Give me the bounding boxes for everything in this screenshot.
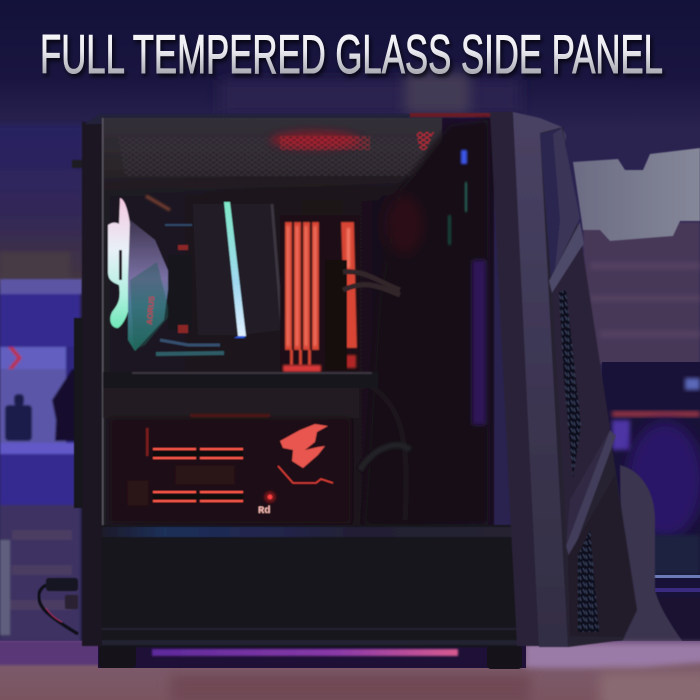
front bezel dark strip [490, 112, 540, 646]
front mesh vent lower [578, 530, 599, 632]
VRM heatsink cover [128, 220, 170, 351]
PCIe slot lights [153, 448, 243, 502]
PC case [72, 112, 637, 647]
middle panel [552, 246, 616, 560]
case feet [99, 645, 522, 669]
AORUS label: AORUS [145, 295, 157, 325]
power cable [39, 578, 78, 634]
under-case shadow and glow [98, 645, 526, 668]
blue reflective strip [102, 527, 518, 537]
upper recess [540, 128, 580, 278]
right side cable and liquid area [360, 120, 488, 525]
graphics card [103, 372, 378, 418]
front bezel light band [513, 112, 572, 647]
dark silhouette on shelf [52, 369, 78, 441]
top mesh vent [118, 131, 434, 176]
debug LED [268, 494, 272, 500]
top edge [84, 114, 495, 124]
front mesh vent upper [559, 290, 581, 478]
RAM modules [280, 215, 400, 375]
motherboard accents [146, 196, 224, 354]
table top [0, 641, 700, 700]
left wall shelf with decorations [0, 279, 82, 642]
diagonal trim upper [549, 222, 584, 293]
icon: AORUS eagle logo [278, 424, 333, 483]
debug code readout: Rd [258, 505, 271, 517]
front panel main [540, 127, 637, 647]
lower motherboard [110, 414, 350, 523]
case rear frame [82, 122, 104, 646]
gaming chair [620, 465, 685, 645]
cooler light bar [224, 202, 246, 336]
right wall window [573, 148, 700, 364]
icon: chevron sign [8, 347, 22, 369]
background monitor [602, 362, 700, 647]
glass side panel [102, 118, 494, 528]
lower shroud [102, 525, 518, 647]
lower recess [568, 475, 637, 637]
rear fan RGB ring [108, 198, 133, 328]
CPU cooler [193, 202, 282, 338]
figurine [5, 394, 32, 441]
